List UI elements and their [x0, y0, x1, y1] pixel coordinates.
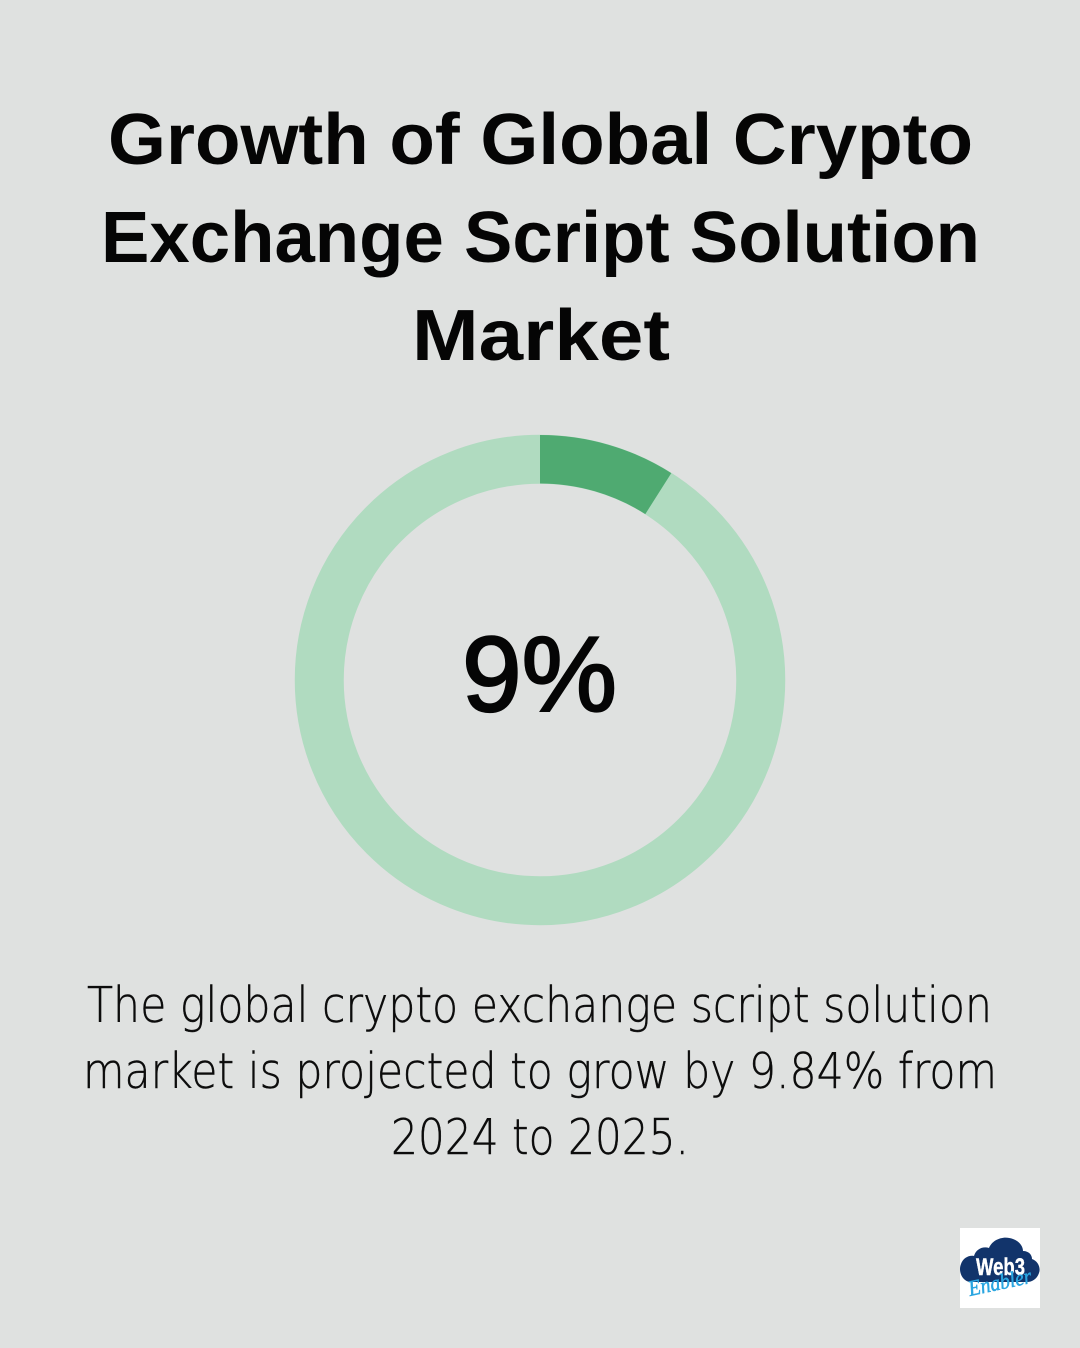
title: Growth of Global Crypto — [108, 100, 973, 180]
logo script word: Enabler — [965, 1263, 1034, 1301]
donut chart: 9% — [319, 435, 761, 901]
icon: cloud — [960, 1238, 1040, 1282]
logo wordmark: Web3 — [976, 1254, 1025, 1281]
title: Market — [412, 296, 670, 376]
donut value: 9% — [462, 614, 617, 734]
logo: Web3 Enabler — [960, 1228, 1040, 1308]
title — [101, 100, 980, 376]
title: Exchange Script Solution — [101, 198, 980, 278]
donut highlighted segment — [540, 435, 671, 514]
logo background — [960, 1228, 1040, 1308]
description text — [83, 977, 997, 1166]
donut track — [319, 459, 761, 901]
description text: 2024 to 2025. — [391, 1109, 689, 1166]
